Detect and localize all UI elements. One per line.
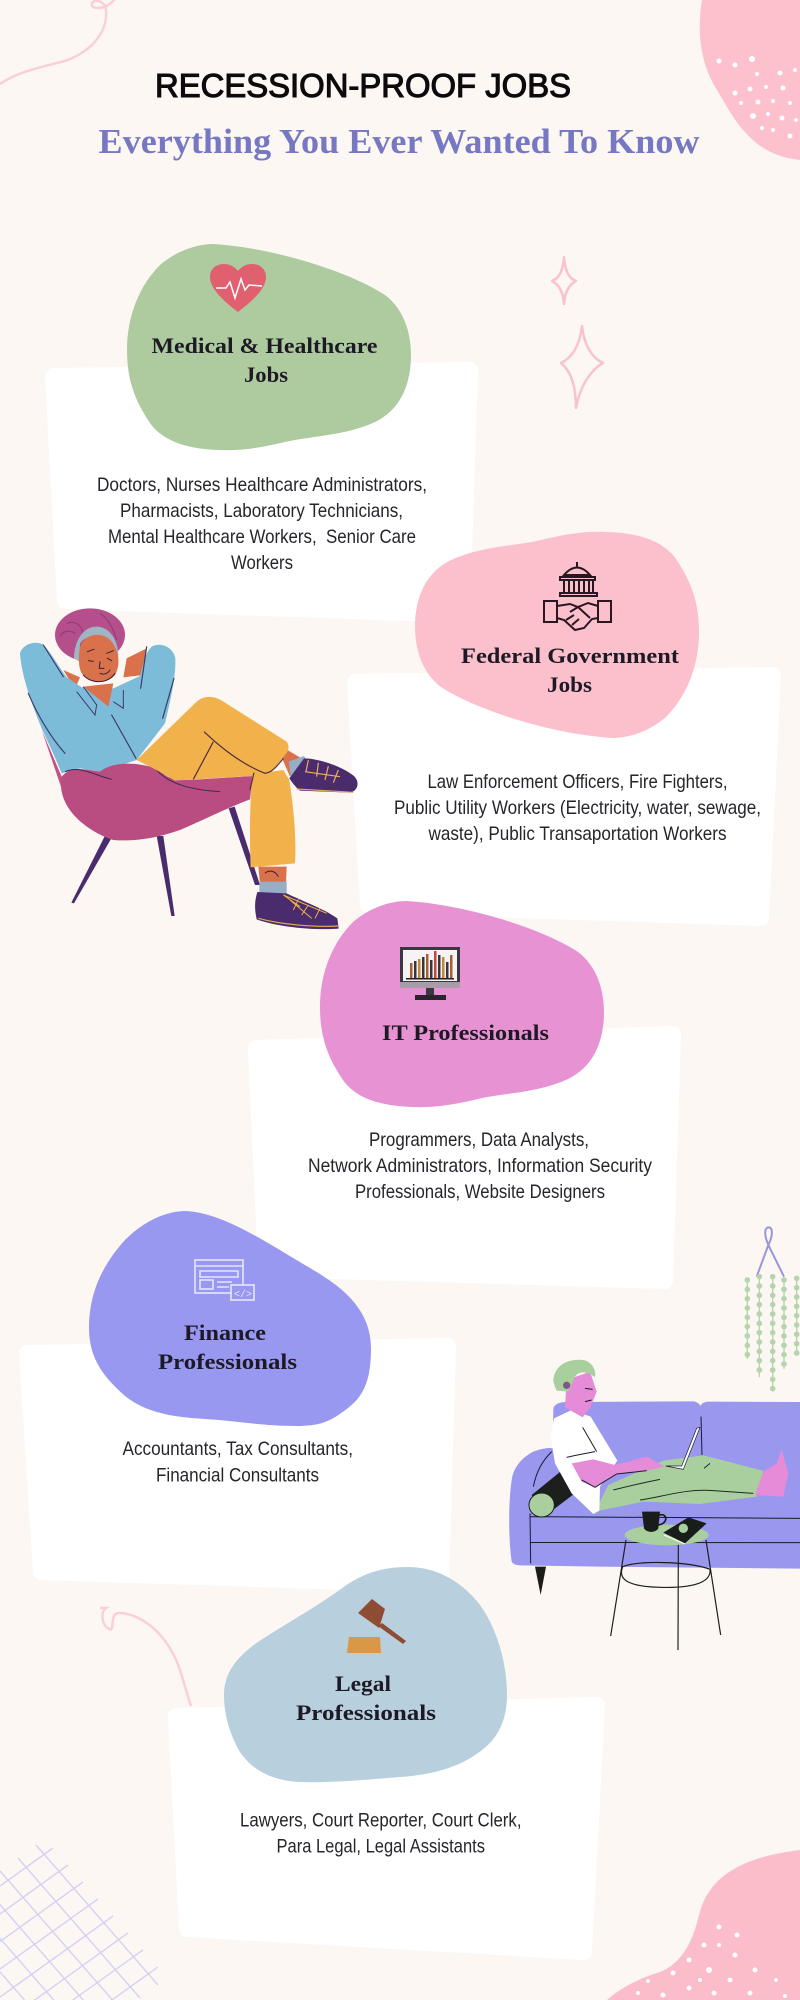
text: medical jobs: Pharmacists, Laboratory Technicians, [120,500,403,522]
subtitle: Everything You Ever Wanted To Know [98,122,700,161]
icon: heart with pulse [210,264,266,312]
card: finance [27,1346,448,1585]
title: RECESSION-PROOF JOBS [155,67,571,104]
heading: legal [296,1671,436,1725]
card: IT [256,1034,673,1281]
heading: legal: Professionals [296,1700,436,1725]
panel: federal government [355,532,773,918]
blob: periwinkle [89,1211,371,1426]
panel: finance professionals [27,1211,448,1585]
text: medical jobs [97,474,427,574]
heading: medical [152,333,378,387]
heading: federal: Federal Government [461,643,680,668]
text: federal jobs [394,771,761,845]
text: finance jobs [122,1438,353,1486]
text: finance jobs: Financial Consultants [156,1464,319,1486]
text: medical jobs: Doctors, Nurses Healthcare Administrators, [97,474,427,496]
card: federal [355,675,773,918]
decoration: top left squiggle [0,0,116,84]
sofa [509,1401,800,1569]
laptop [666,1427,700,1469]
blob: pale blue [224,1567,507,1782]
heading: legal: Legal [335,1671,391,1696]
heading: federal: Jobs [547,672,592,697]
text: legal jobs: Para Legal, Legal Assistants [276,1836,485,1858]
text: federal jobs: Law Enforcement Officers, Fire Fighters, [428,771,728,793]
blob: orchid [320,901,604,1107]
illustration: person on sofa with laptop [509,1360,800,1650]
illustration: hanging plant [747,1227,797,1390]
panel: IT professionals [256,901,673,1281]
heading: finance [158,1320,297,1374]
foot [755,1449,788,1497]
bolster [532,1471,574,1516]
shirt [551,1410,617,1514]
illustration: man relaxing in chair [20,608,358,929]
heading: medical: Jobs [244,362,288,387]
icon: code window [195,1260,254,1301]
text: federal jobs: waste), Public Transaportation Workers [428,823,727,845]
text: IT jobs: Network Administrators, Information Security [308,1155,652,1177]
decoration: bottom left grid [0,1845,158,2000]
side table [611,1540,721,1650]
blob: green [127,244,411,450]
decoration: sparkles [552,257,603,408]
card: medical [53,370,470,615]
icon: code window: </> [234,1289,252,1301]
icon: gavel [347,1599,406,1653]
text: finance jobs: Accountants, Tax Consultants, [122,1438,353,1460]
blob: top right pink [700,0,800,160]
decoration: lower squiggle [100,1608,191,1706]
pants [595,1455,763,1512]
heading: medical: Medical & Healthcare [152,333,378,358]
text: IT jobs: Programmers, Data Analysts, [369,1129,589,1151]
text: medical jobs: Workers [231,552,293,574]
head [565,1372,597,1417]
text: medical jobs: Mental Healthcare Workers, Senior Care [108,526,416,548]
arm [572,1457,665,1487]
card: legal [176,1705,597,1952]
icon: government handshake [544,562,611,630]
heading: IT: IT Professionals [382,1020,549,1045]
panel: legal professionals [176,1567,597,1952]
text: IT jobs [308,1129,652,1203]
heading: finance: Finance [184,1320,266,1345]
text: legal jobs: Lawyers, Court Reporter, Court Clerk, [240,1810,522,1832]
heading: finance: Professionals [158,1349,297,1374]
blob: bottom right pink [607,1850,800,2000]
text: legal jobs [240,1810,522,1858]
blob: pink [415,532,699,738]
text: IT jobs: Professionals, Website Designers [355,1181,605,1203]
panel: medical and healthcare [53,244,470,615]
heading: federal [461,643,680,697]
icon: monitor with bars [400,947,460,1000]
